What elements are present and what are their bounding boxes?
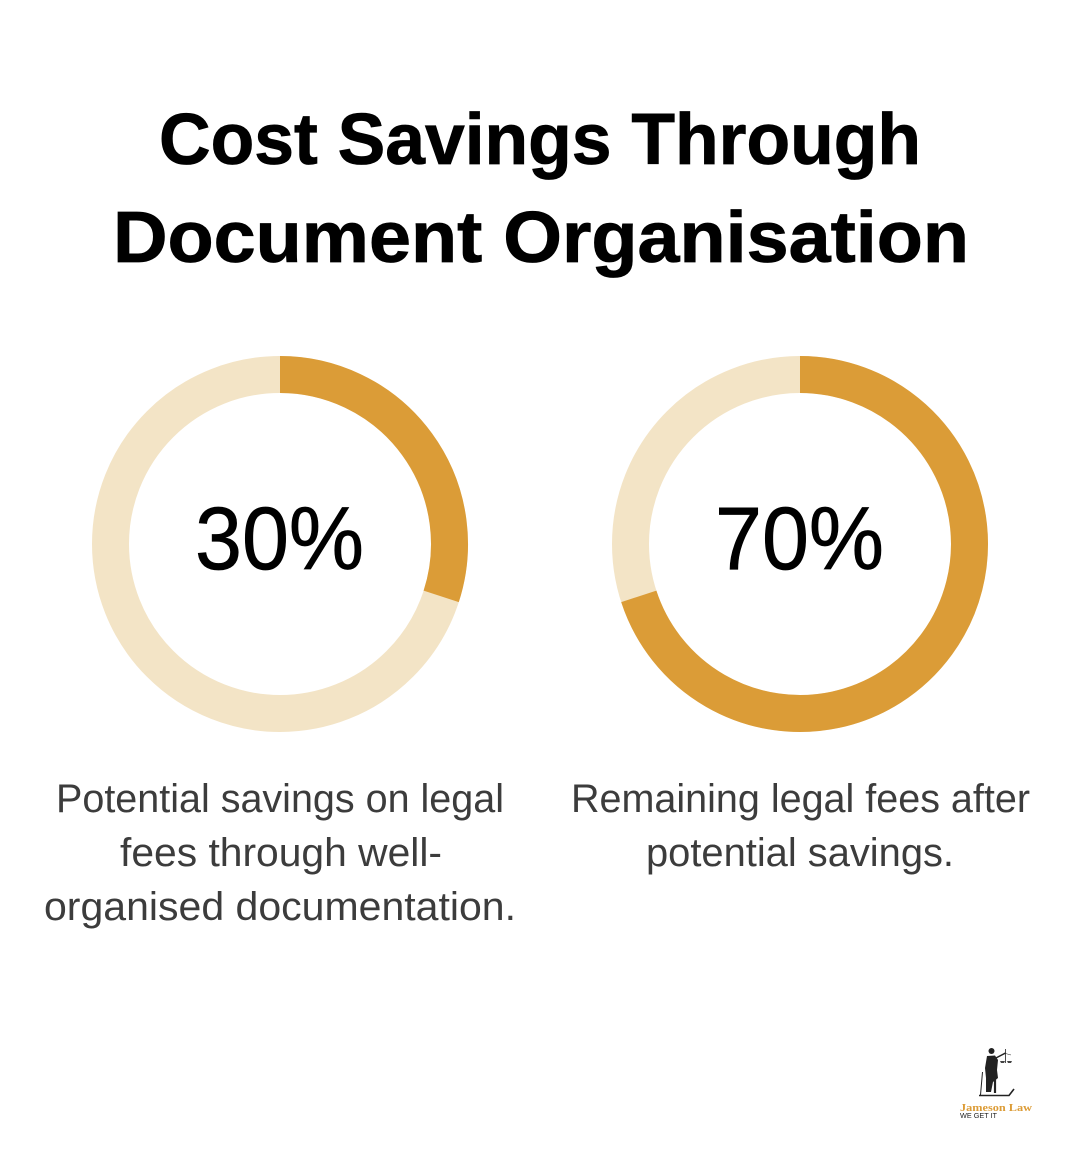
- title: [113, 100, 969, 278]
- logo: Jameson Law: [960, 1048, 1032, 1120]
- tagline: WE GET IT: [960, 1113, 998, 1120]
- icon: lady justice with letter L: [979, 1048, 1014, 1096]
- description: potential savings: fees through well-: [120, 831, 442, 875]
- donut chart: 30%: [110, 374, 450, 714]
- value: 70%: 70%: [715, 488, 884, 588]
- description: remaining fees: Remaining legal fees after: [571, 777, 1030, 821]
- title: Cost Savings Through: [159, 100, 921, 180]
- panel: 30% savings: [44, 374, 516, 929]
- description: remaining fees: [571, 777, 1030, 875]
- value: 30%: 30%: [195, 488, 364, 588]
- description: potential savings: Potential savings on legal: [56, 777, 504, 821]
- description: remaining fees: potential savings.: [646, 831, 954, 875]
- description: potential savings: [44, 777, 516, 929]
- title: Document Organisation: [113, 198, 969, 278]
- description: potential savings: organised documentation.: [44, 885, 516, 929]
- panel: 70% remaining: [571, 374, 1030, 875]
- brand name: Jameson Law: [960, 1102, 1032, 1114]
- donut chart: 70%: [630, 374, 970, 714]
